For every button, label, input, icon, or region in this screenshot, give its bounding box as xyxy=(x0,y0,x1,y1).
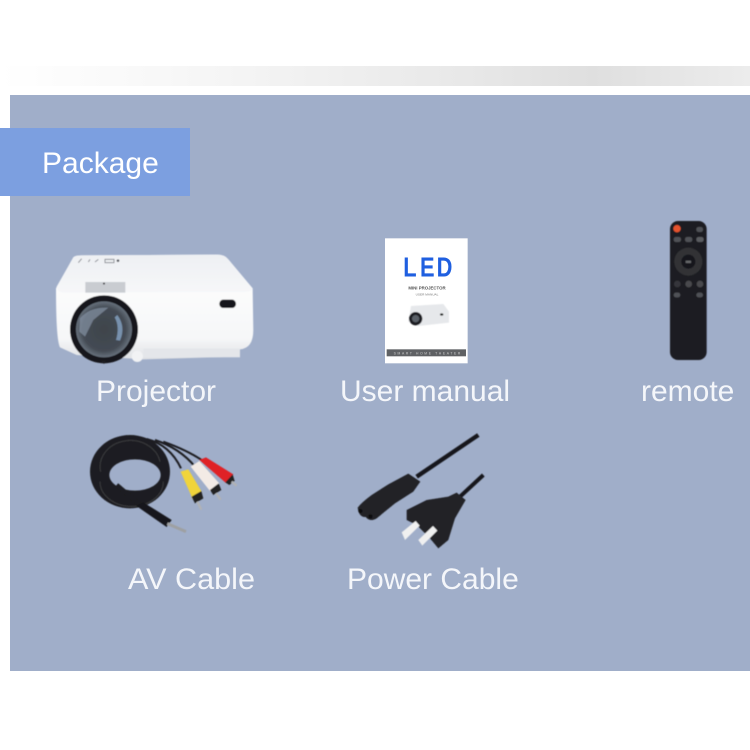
item: power cable xyxy=(358,435,483,548)
red plug xyxy=(199,457,237,486)
label: Power Cable: Power Cable xyxy=(347,563,519,596)
manual small caption: USER MANUAL xyxy=(416,293,439,297)
label: AV Cable: AV Cable xyxy=(128,563,255,596)
label: remote: remote xyxy=(641,375,734,408)
manual subtitle: MINI PROJECTOR xyxy=(408,285,447,290)
label: Projector: Projector xyxy=(96,375,216,408)
white plug xyxy=(191,461,221,500)
top gradient band xyxy=(0,66,750,86)
yellow plug xyxy=(181,469,203,510)
label: User manual: User manual xyxy=(340,375,510,408)
item: remote control xyxy=(670,221,707,360)
heading: Package badge: Package xyxy=(42,147,159,180)
manual footer strip: SMART HOME THEATER xyxy=(394,351,461,355)
item: projector photo xyxy=(56,255,253,364)
manual title LED: LED xyxy=(403,253,452,283)
panel: package background xyxy=(10,95,750,671)
item: AV cable xyxy=(90,435,237,532)
heading: Package badge xyxy=(0,128,190,196)
item: user manual booklet xyxy=(385,238,468,363)
manual projector image xyxy=(408,304,449,326)
